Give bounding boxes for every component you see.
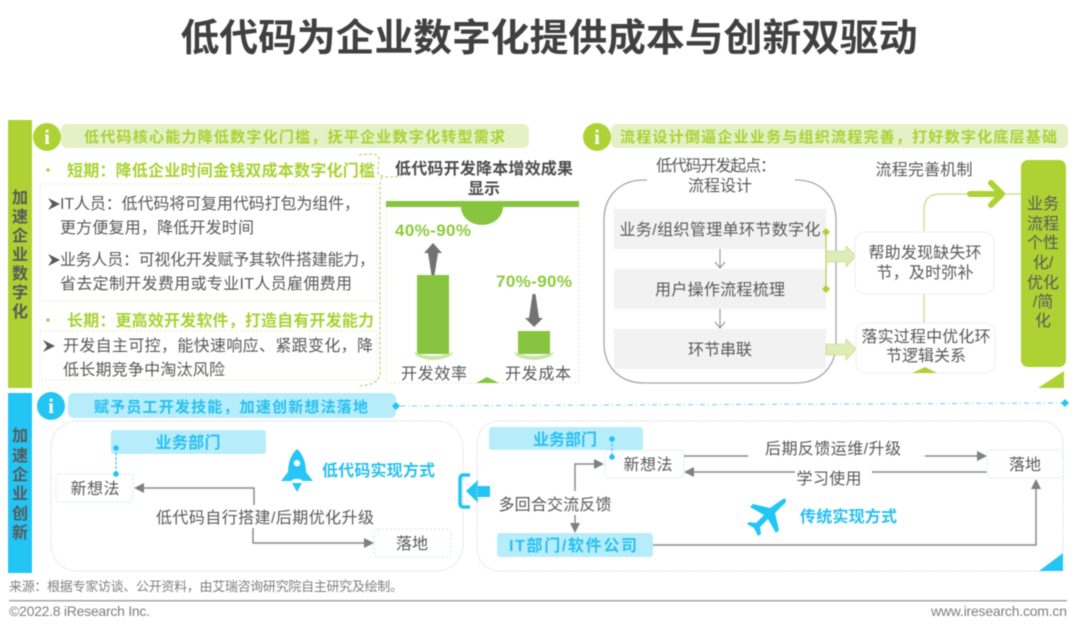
long-term box: 低长期竞争中淘汰风险 (63, 361, 225, 379)
mechanism label: 流程完善机制 (876, 161, 972, 179)
landing box: 落地 (1009, 456, 1041, 474)
traditional heading: 传统实现方式 (800, 507, 897, 526)
low-code build label: 低代码自行搭建/后期优化升级 (156, 509, 374, 527)
result box: 业务 (1027, 195, 1059, 213)
mechanism box 2 (856, 323, 995, 373)
panel: accelerate enterprise digitalization sidebar: 业 (12, 246, 28, 264)
website: www.iresearch.com.cn (930, 603, 1067, 619)
multi-round label: 多回合交流反馈 (498, 496, 612, 514)
new idea box (605, 450, 684, 478)
result box: 个性 (1027, 234, 1059, 252)
panel: accelerate enterprise digitalization sidebar: 化 (12, 302, 28, 321)
panel: accelerate enterprise digitalization sidebar: 速 (12, 208, 28, 226)
learn label: 学习使用 (796, 470, 862, 488)
small corner triangle (476, 377, 499, 383)
result box: 优化 (1027, 274, 1059, 292)
step 3: 环节串联 (688, 341, 752, 359)
long-term box: 开发自主可控，能快速响应、紧跟变化，降 (63, 336, 373, 355)
mechanism box 2: 落实过程中优化环 (862, 328, 990, 346)
chart heading: 显示 (468, 181, 500, 198)
step 2 (614, 269, 826, 309)
icon: comparison arrow (460, 475, 490, 507)
result box: /简 (1033, 293, 1053, 311)
arrow to landing (684, 451, 987, 461)
result box (1021, 160, 1066, 367)
heading: process design: i (594, 125, 600, 149)
result box: 流程 (1027, 215, 1059, 233)
short-term heading: 短期：降低企业时间金钱双成本数字化门槛 (67, 161, 375, 180)
short-term box: 业务人员：可视化开发赋予其软件搭建能力， (60, 251, 375, 269)
feedback line (924, 194, 1021, 323)
short-term box (40, 184, 377, 301)
heading: core capability (33, 123, 529, 151)
panel: accelerate enterprise digitalization sidebar (8, 120, 32, 388)
corner triangle green (1038, 371, 1064, 388)
connector with diamonds (822, 228, 830, 293)
process outline (604, 180, 836, 383)
bar: development cost: 开发成本 (505, 365, 571, 383)
result box: 化 (1035, 312, 1051, 330)
step 1 (614, 209, 826, 249)
chart header bar (386, 201, 579, 225)
arrow back to idea (684, 467, 987, 477)
new idea box: 新想法 (70, 480, 120, 498)
panel: accelerate enterprise innovation sidebar (8, 393, 32, 573)
mechanism box 1 (855, 232, 994, 294)
multi-round arrow (570, 459, 604, 533)
bracket connector (359, 154, 401, 386)
feedback label: 后期反馈运维/升级 (765, 440, 901, 458)
panel: accelerate enterprise digitalization sidebar: 字 (12, 283, 28, 302)
icon: rocket (281, 449, 313, 492)
arrow to landing (253, 528, 374, 548)
chart frame (386, 207, 579, 383)
panel: process design (583, 123, 1068, 388)
block arrow 1 (826, 246, 856, 267)
short-term box: 更方便复用，降低开发时间 (60, 219, 254, 237)
heading: process design (583, 123, 1068, 151)
process start label (656, 157, 776, 195)
panel: accelerate enterprise digitalization sidebar: 企 (12, 226, 28, 245)
IT department label: IT部门/软件公司 (509, 536, 637, 555)
arrow to new idea (134, 483, 254, 505)
landing box: 落地 (396, 535, 428, 553)
low-code heading: 低代码实现方式 (322, 461, 435, 480)
step arrow 1 (715, 249, 725, 268)
panel: traditional approach (477, 421, 1063, 571)
panel: accelerate enterprise innovation sidebar: 加 (12, 427, 28, 445)
panel: accelerate enterprise innovation sidebar: 企 (12, 465, 28, 484)
copyright: ©2022.8 iResearch Inc. (9, 603, 150, 619)
short-term box: IT人员：低代码将可复用代码打包为组件， (60, 195, 360, 213)
mechanism box 1: 节，及时弥补 (876, 264, 974, 282)
source note: 来源：根据专家访谈、公开资料，由艾瑞咨询研究院自主研究及绘制。 (9, 579, 403, 594)
result box: 化/ (1033, 254, 1054, 272)
short-term bullet (46, 168, 50, 172)
bar: development efficiency: 开发效率 (401, 365, 467, 383)
IT department label (497, 533, 653, 557)
mechanism box 2: 节逻辑关系 (886, 347, 966, 365)
thick arrow (970, 183, 1002, 205)
dotted link (113, 445, 119, 477)
business department label (489, 427, 643, 450)
landing box (374, 529, 451, 557)
chart heading (395, 159, 573, 198)
panel: accelerate enterprise innovation sidebar: 业 (12, 485, 28, 503)
business department label (111, 430, 266, 454)
heading: core capability: i (44, 125, 50, 149)
panel: low-code approach (51, 421, 463, 571)
heading: process design: 流程设计倒逼企业业务与组织流程完善，打好数字化底层基础 (620, 128, 1057, 146)
long-term box (40, 331, 377, 380)
block arrow 2 (826, 339, 856, 360)
panel: accelerate enterprise innovation sidebar: 速 (12, 447, 28, 465)
step 1: 业务/组织管理单环节数字化 (620, 221, 820, 239)
process start label: 低代码开发起点： (656, 157, 776, 175)
arrow IT to landing (653, 479, 1041, 545)
long-term bullet (46, 318, 50, 322)
landing box (987, 450, 1063, 478)
mechanism box 1: 帮助发现缺失环 (868, 244, 982, 262)
panel: core capability (33, 123, 529, 386)
bar: development cost (496, 272, 572, 383)
icon: airplane (747, 499, 786, 536)
step 2: 用户操作流程梳理 (655, 281, 785, 299)
bar: development efficiency (395, 221, 471, 383)
corner triangle blue (1039, 553, 1063, 571)
bar: development cost: 70%-90% (496, 272, 572, 291)
footer rule (9, 600, 1067, 602)
short-term box: 省去定制开发费用或专业IT人员雇佣费用 (60, 275, 352, 293)
new idea box: 新想法 (624, 456, 672, 474)
heading: employee skills: i (48, 394, 54, 418)
dotted link (609, 436, 615, 460)
new idea box (56, 474, 133, 502)
business department label: 业务部门 (533, 430, 597, 449)
panel: accelerate enterprise innovation sidebar: 创 (12, 505, 28, 523)
panel: accelerate enterprise digitalization sidebar: 数 (12, 265, 28, 283)
process start label: 流程设计 (688, 177, 752, 195)
step arrow 2 (715, 309, 725, 328)
long-term heading: 长期：更高效开发软件，打造自有开发能力 (67, 311, 374, 330)
heading: employee skills (37, 392, 1069, 420)
panel: accelerate enterprise digitalization sidebar: 加 (12, 189, 28, 207)
title: 低代码为企业数字化提供成本与创新双驱动 (180, 18, 918, 60)
heading: core capability: 低代码核心能力降低数字化门槛，抚平企业数字化转型需求 (84, 128, 505, 146)
business department label: 业务部门 (156, 433, 220, 452)
chart heading: 低代码开发降本增效成果 (395, 159, 573, 178)
bar: development efficiency: 40%-90% (395, 221, 471, 240)
heading: employee skills: 赋予员工开发技能，加速创新想法落地 (94, 398, 368, 416)
panel: results chart (386, 159, 579, 383)
panel: accelerate enterprise innovation sidebar: 新 (12, 523, 28, 542)
step 3 (614, 329, 826, 369)
